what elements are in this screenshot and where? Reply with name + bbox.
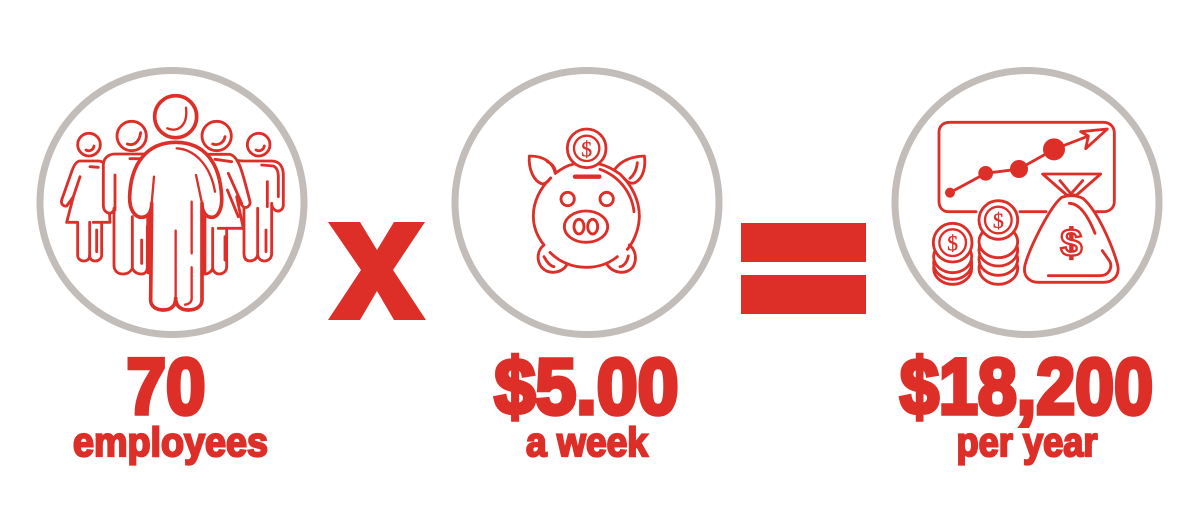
data points bbox=[945, 188, 955, 198]
icon: group of people bbox=[61, 96, 283, 310]
chart frame bbox=[939, 122, 1114, 212]
right coin stack: $ bbox=[993, 208, 1004, 233]
money bag bbox=[1024, 174, 1118, 282]
caption: employees: employees bbox=[73, 419, 268, 465]
far left woman bbox=[61, 133, 110, 261]
label: $5.00 a week bbox=[494, 342, 678, 465]
panel: yearly total bbox=[895, 70, 1159, 334]
equals sign bbox=[741, 223, 866, 314]
amount: $18,200: $18,200 bbox=[900, 342, 1153, 430]
panel: weekly saving bbox=[455, 70, 719, 334]
pig body bbox=[533, 164, 639, 267]
snout bbox=[564, 211, 608, 242]
right coin stack bbox=[979, 201, 1018, 284]
label: $18,200 per year bbox=[900, 342, 1153, 465]
number: 70: 70 bbox=[126, 342, 206, 430]
caption: per year: per year bbox=[956, 419, 1098, 465]
circle: weekly saving bbox=[455, 70, 719, 334]
icon: chart, coins and money bag bbox=[933, 122, 1118, 284]
coin slot bbox=[575, 170, 599, 183]
right woman bbox=[193, 121, 250, 274]
coin bbox=[567, 129, 606, 168]
trend line bbox=[950, 137, 1087, 193]
amount: $5.00: $5.00 bbox=[494, 342, 678, 430]
multiply sign bbox=[328, 222, 426, 320]
money bag: $ bbox=[1060, 221, 1082, 265]
caption: a week: a week bbox=[526, 419, 648, 465]
left coin stack: $ bbox=[947, 231, 958, 256]
circle: yearly total bbox=[895, 70, 1159, 334]
panel: employees bbox=[40, 70, 304, 334]
highlight bbox=[600, 169, 634, 212]
dollar sign: $ bbox=[581, 136, 592, 161]
icon: piggy bank with coin bbox=[529, 129, 645, 272]
left coin stack bbox=[933, 223, 972, 284]
far right man bbox=[230, 133, 283, 261]
circle: employees bbox=[40, 70, 304, 334]
feet bbox=[538, 245, 567, 272]
center figure bbox=[130, 96, 222, 310]
label: 70 employees bbox=[73, 342, 268, 465]
ears bbox=[529, 156, 555, 184]
left man bbox=[103, 121, 158, 274]
arrow head bbox=[1081, 129, 1107, 149]
eyes bbox=[561, 192, 574, 206]
